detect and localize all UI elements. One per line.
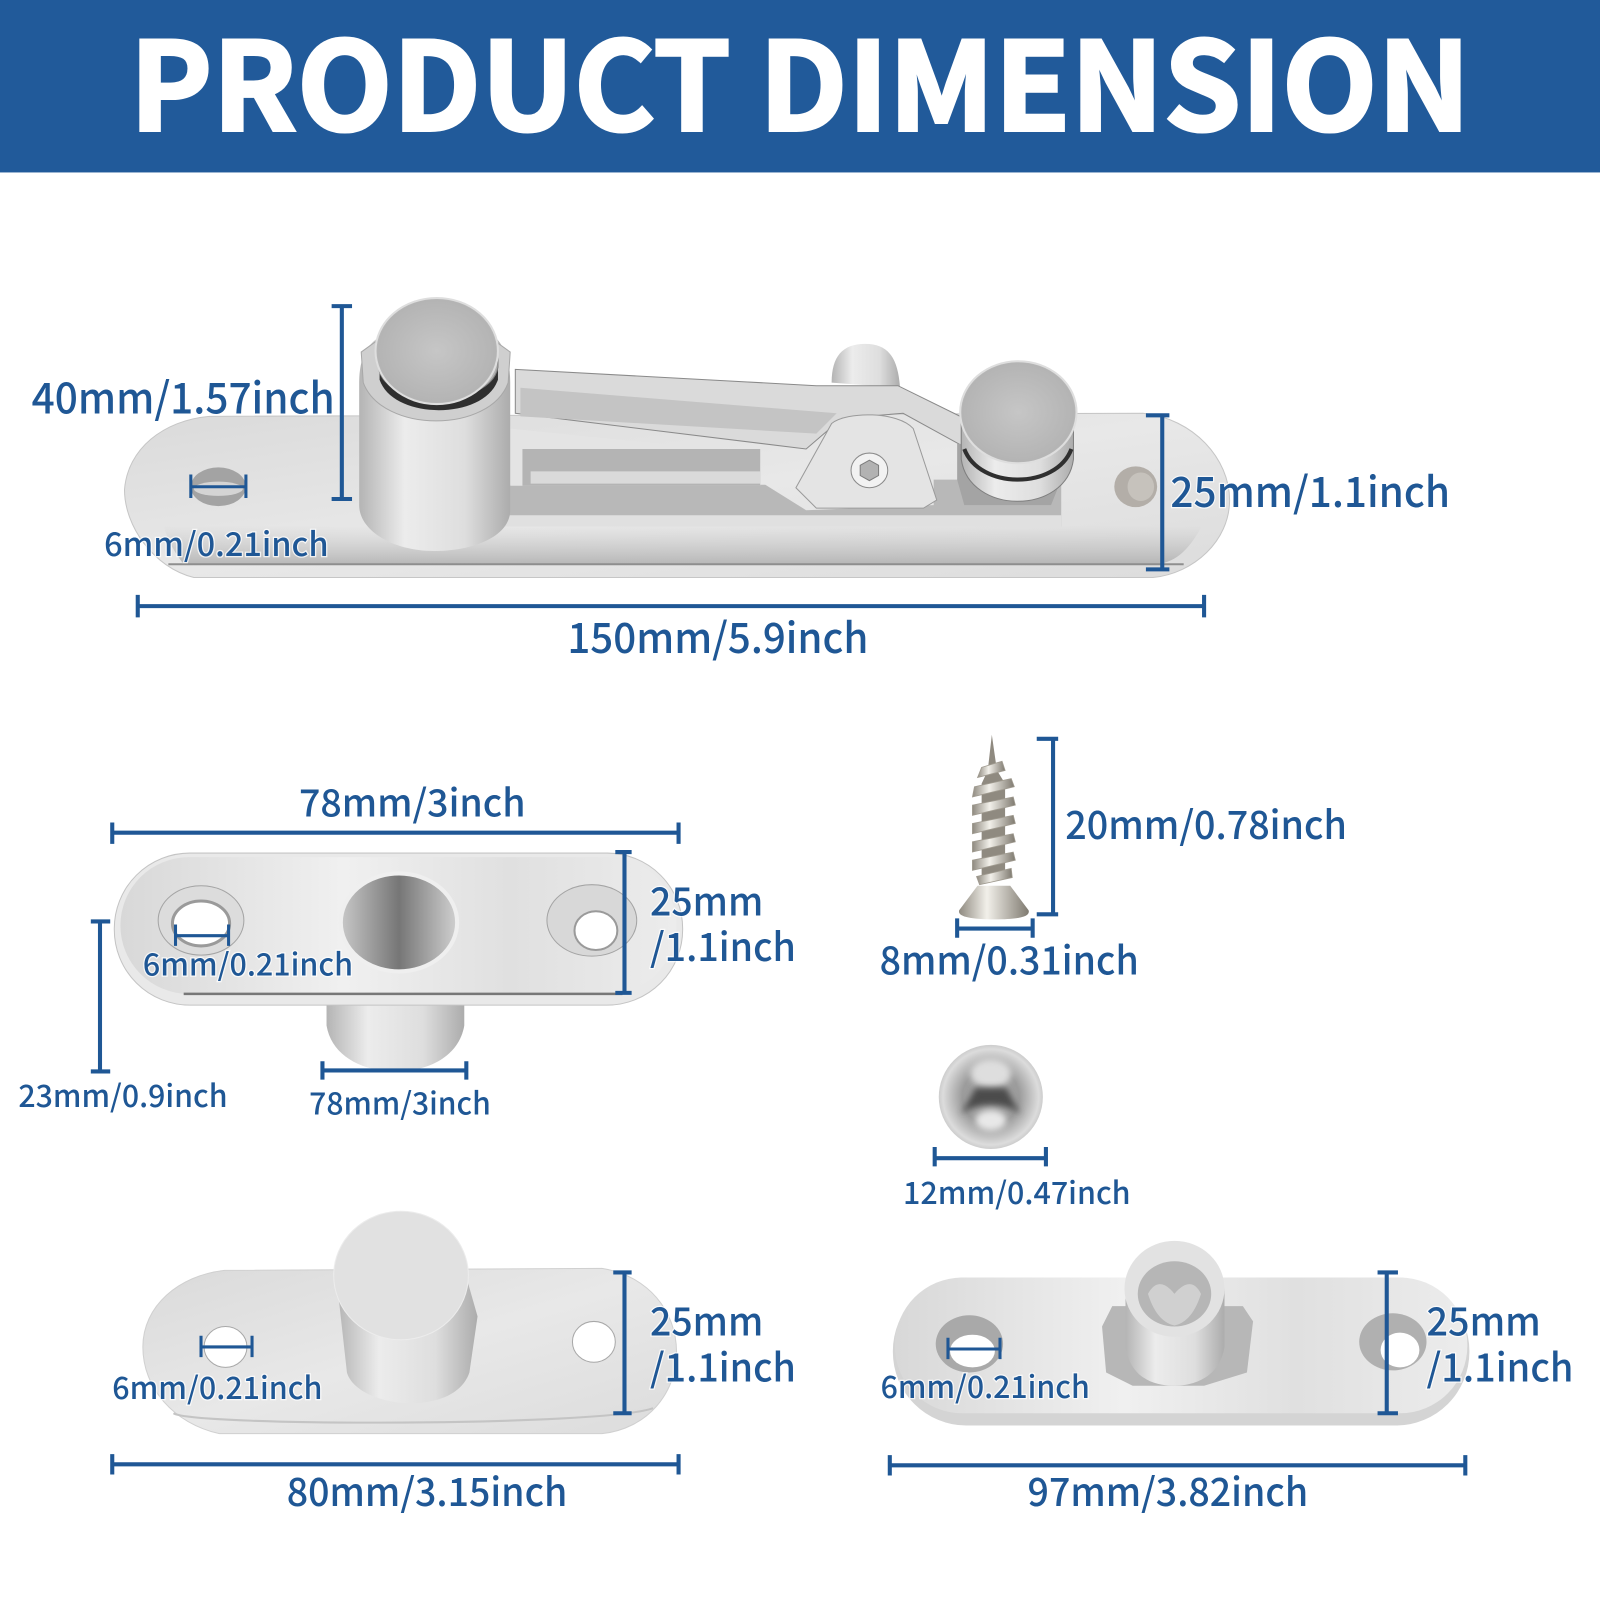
raised rail [505, 480, 1061, 527]
dimension: height 40mm [32, 306, 352, 499]
header banner [0, 0, 1600, 172]
dimension: plate width 25mm: 25mm [650, 1292, 763, 1348]
plate holes [936, 1313, 1427, 1372]
dimension: plate width 25mm: /1.1inch [1427, 1338, 1573, 1394]
centre bore [341, 873, 457, 971]
left countersunk hole [158, 886, 244, 955]
left post [359, 298, 510, 551]
dimension: plate width 25mm: /1.1inch [650, 1338, 796, 1394]
plate mounting holes [191, 466, 1157, 507]
right countersunk hole [547, 885, 637, 956]
product: cup plate with dimensions [881, 1241, 1573, 1518]
dimension: length 97mm: 97mm/3.82inch [1028, 1462, 1308, 1518]
dimension: length 150mm [138, 595, 1204, 666]
lever arm [515, 369, 964, 449]
dimension: plate width 25mm [613, 1272, 796, 1413]
rear stud [832, 344, 900, 388]
pivot bolt [851, 453, 888, 488]
base plate [124, 413, 1230, 578]
dimension: length 20mm: 20mm/0.78inch [1065, 795, 1347, 851]
T block [1102, 1306, 1253, 1386]
plate [893, 1278, 1469, 1426]
plate [114, 853, 683, 1005]
dimension: plate width 25mm [1146, 415, 1450, 569]
dimension: length 20mm [1037, 739, 1347, 914]
product: pin plate with dimensions [112, 1211, 796, 1518]
pin cylinder [334, 1211, 478, 1403]
left knob cap [376, 298, 498, 404]
ball [939, 1045, 1043, 1149]
dimension: length 78mm [112, 772, 679, 844]
screw threads [972, 761, 1015, 885]
product: socket plate with dimensions [18, 772, 796, 1123]
dimension: plate width 25mm [1378, 1272, 1573, 1413]
dimension: diameter 12mm [903, 1147, 1131, 1213]
dimension: plate width 25mm: 25mm [650, 871, 763, 927]
dimension: height 23mm [18, 921, 228, 1116]
dimension: hole 6mm: 6mm/0.21inch [104, 519, 329, 566]
cup bore [1138, 1261, 1211, 1327]
plate [143, 1268, 677, 1434]
dimension: length 80mm: 80mm/3.15inch [287, 1462, 567, 1518]
screw shaft tip [982, 735, 1005, 878]
dimension: hole 6mm: 6mm/0.21inch [112, 1363, 322, 1408]
dimension: height 40mm: 40mm/1.57inch [32, 364, 335, 426]
dimension: plate width 25mm: 25mm/1.1inch [1170, 459, 1450, 520]
dimension: length 150mm: 150mm/5.9inch [567, 605, 868, 666]
plate holes [204, 1321, 615, 1367]
product: steel ball with dimension [903, 1045, 1131, 1213]
dimension: length 78mm: 78mm/3inch [299, 772, 526, 827]
dimension: height 23mm: 23mm/0.9inch [18, 1071, 228, 1116]
plate shadow [194, 1426, 633, 1436]
dimension: hole 6mm [112, 1336, 322, 1408]
cup post [1124, 1241, 1224, 1386]
dimension: diameter 12mm: 12mm/0.47inch [903, 1168, 1131, 1213]
dimension: hole 6mm: 6mm/0.21inch [143, 940, 353, 985]
dimension: hole 6mm [104, 474, 329, 566]
dimension: plate width 25mm: /1.1inch [650, 917, 796, 973]
dimension: length 97mm [890, 1455, 1465, 1518]
dimension: plate width 25mm [615, 852, 796, 993]
dimension: cylinder 78mm: 78mm/3inch [309, 1078, 491, 1123]
dimension: plate width 25mm: 25mm [1427, 1292, 1541, 1348]
product: screw with dimensions [880, 735, 1347, 986]
dimension: hole 6mm: 6mm/0.21inch [881, 1362, 1090, 1407]
product: main latch assembly with dimensions [32, 298, 1450, 666]
pivot bracket [796, 415, 937, 508]
rear cylinder [327, 995, 464, 1071]
pin top face [334, 1211, 468, 1340]
dimension: head 8mm: 8mm/0.31inch [880, 930, 1139, 986]
slot [510, 429, 760, 486]
right knob cap [960, 361, 1077, 463]
dimension: length 80mm [112, 1454, 679, 1518]
screw head [959, 886, 1029, 919]
dimension: hole 6mm [881, 1338, 1090, 1407]
right roller [957, 361, 1077, 505]
